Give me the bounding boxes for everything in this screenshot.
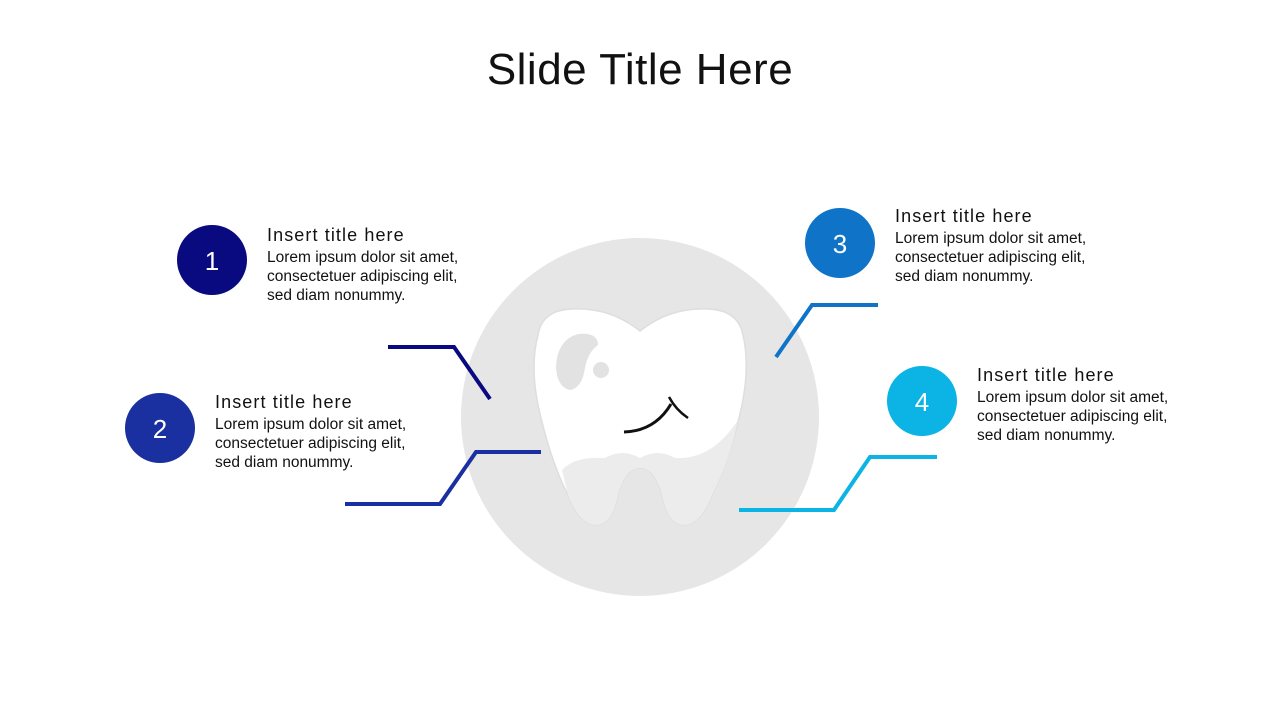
title: Slide Title Here <box>487 45 793 94</box>
text block 3: Lorem ipsum dolor sit amet, <box>895 230 1086 247</box>
arrow: connector 3 <box>776 305 878 357</box>
text block 1: sed diam nonummy. <box>267 287 405 304</box>
text block 4: consectetuer adipiscing elit, <box>977 408 1167 425</box>
arrow: connector 2 <box>345 452 541 504</box>
background circle <box>461 238 819 596</box>
text block 1: Lorem ipsum dolor sit amet, <box>267 249 458 266</box>
badge 1 <box>177 225 247 295</box>
badge 1: 1 <box>205 246 219 276</box>
text block 4: sed diam nonummy. <box>977 427 1115 444</box>
text block 3 <box>895 206 1086 285</box>
badge 2: 2 <box>153 414 167 444</box>
text block 1: Insert title here <box>267 225 405 245</box>
text block 2 <box>215 392 406 471</box>
text block 4: Insert title here <box>977 365 1115 385</box>
text block 2: Lorem ipsum dolor sit amet, <box>215 416 406 433</box>
text block 3: Insert title here <box>895 206 1033 226</box>
text block 2: sed diam nonummy. <box>215 454 353 471</box>
text block 4: Lorem ipsum dolor sit amet, <box>977 389 1168 406</box>
text block 3: consectetuer adipiscing elit, <box>895 249 1085 266</box>
text block 1 <box>267 225 458 304</box>
badge 3 <box>805 208 875 278</box>
arrow: connector 4 <box>739 457 937 510</box>
text block 1: consectetuer adipiscing elit, <box>267 268 457 285</box>
badge 4 <box>887 366 957 436</box>
badge 3: 3 <box>833 229 847 259</box>
text block 2: consectetuer adipiscing elit, <box>215 435 405 452</box>
text block 3: sed diam nonummy. <box>895 268 1033 285</box>
icon: tooth <box>534 309 746 525</box>
badge 2 <box>125 393 195 463</box>
arrow: connector 1 <box>388 347 490 399</box>
text block 4 <box>977 365 1168 444</box>
badge 4: 4 <box>915 387 929 417</box>
text block 2: Insert title here <box>215 392 353 412</box>
